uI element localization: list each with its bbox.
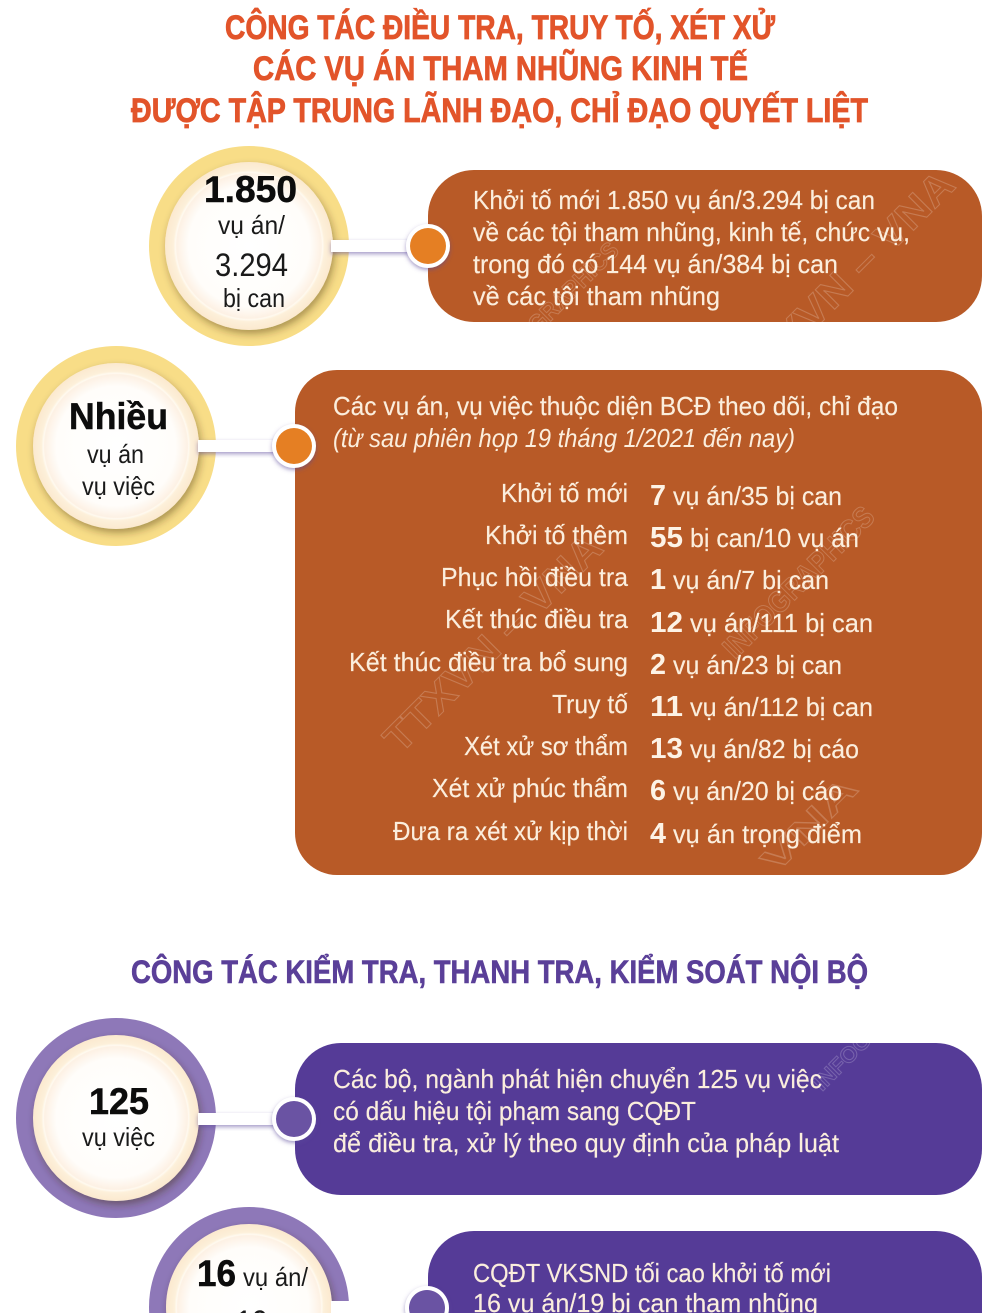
stage values: 55	[650, 522, 683, 554]
panel: new prosecutions: INFOGRAPHICS	[485, 237, 624, 376]
panel: steering committee cases: VNA	[754, 769, 866, 881]
circle: 125 cases: vụ việc	[82, 1122, 155, 1152]
stage labels: Xét xử phúc thẩm	[432, 773, 628, 803]
panel text: để điều tra, xử lý theo quy định của pháp luật	[333, 1128, 840, 1158]
panel: ministries	[295, 1027, 982, 1195]
circle: 1.850 cases: bị can	[223, 283, 285, 313]
circle: 125 cases: 125	[89, 1081, 149, 1122]
circle: many cases: vụ việc	[82, 471, 155, 501]
panel text: CQĐT VKSND tối cao khởi tố mới	[473, 1258, 831, 1288]
panel text: Khởi tố mới 1.850 vụ án/3.294 bị can	[473, 185, 875, 215]
panel: steering committee cases: INFOGRAPHICS	[717, 500, 881, 665]
circle: many cases	[16, 346, 216, 546]
stage labels: Đưa ra xét xử kịp thời	[393, 816, 628, 846]
panel text: Các bộ, ngành phát hiện chuyển 125 vụ việc	[333, 1064, 822, 1094]
stage values: vụ án/112 bị can	[690, 692, 873, 722]
stage values: 7	[650, 480, 666, 512]
panel text: trong đó có 144 vụ án/384 bị can	[473, 249, 838, 279]
title: CÔNG TÁC ĐIỀU TRA, TRUY TỐ, XÉT XỬ	[225, 8, 776, 47]
circle: 1.850 cases: 3.294	[215, 247, 288, 283]
circle: 16 cases: vụ án/	[243, 1262, 309, 1292]
stage labels	[349, 478, 629, 846]
panel text	[473, 185, 910, 311]
panel: steering committee cases	[295, 370, 982, 881]
circle: many cases: Nhiều	[69, 396, 168, 437]
circle: 1.850 cases: vụ án/	[218, 210, 286, 240]
panel text: về các tội tham nhũng	[473, 281, 720, 311]
circle: 16 cases: 16	[197, 1253, 236, 1294]
stage values: 2	[650, 649, 666, 681]
panel: new prosecutions	[428, 162, 982, 398]
panel text: về các tội tham nhũng, kinh tế, chức vụ,	[473, 217, 910, 247]
circle: many cases: vụ án	[87, 439, 144, 469]
circle: 125 cases	[16, 1018, 216, 1218]
circle: 16 cases	[149, 1207, 349, 1313]
stage labels: Khởi tố thêm	[485, 520, 628, 550]
stage values	[650, 480, 873, 850]
stage values: vụ án/82 bị cáo	[690, 734, 859, 764]
circle: 1.850 cases	[149, 146, 349, 346]
stage labels: Truy tố	[552, 689, 628, 719]
title: CÁC VỤ ÁN THAM NHŨNG KINH TẾ	[253, 50, 748, 88]
section heading: CÔNG TÁC KIỂM TRA, THANH TRA, KIỂM SOÁT NỘI BỘ	[131, 954, 868, 990]
connector: circle 3 to panel	[198, 1097, 316, 1141]
stage values: vụ án trọng điểm	[673, 819, 862, 849]
stage values: 12	[650, 607, 683, 639]
circle: 1.850 cases: 1.850	[204, 169, 297, 210]
connector: circle 4 to panel	[331, 1286, 449, 1313]
title	[131, 8, 868, 130]
stage labels: Kết thúc điều tra	[445, 604, 629, 634]
stage values: 11	[650, 691, 683, 723]
panel heading: (từ sau phiên họp 19 tháng 1/2021 đến nay)	[333, 423, 795, 453]
panel heading: Các vụ án, vụ việc thuộc diện BCĐ theo dõi, chỉ đạo	[333, 391, 898, 421]
panel: steering committee cases: TTXVN – VNA	[375, 525, 611, 761]
stage values: 4	[650, 818, 666, 850]
stage values: vụ án/23 bị can	[673, 650, 842, 680]
panel: new prosecutions: TTXVN – VNA	[727, 162, 963, 398]
stage values: 6	[650, 775, 666, 807]
panel text	[473, 1258, 831, 1313]
stage labels: Khởi tố mới	[501, 478, 628, 508]
stage labels: Kết thúc điều tra bổ sung	[349, 647, 628, 677]
stage values: 1	[650, 564, 666, 596]
stage values: vụ án/111 bị can	[690, 608, 873, 638]
panel text	[333, 1064, 840, 1158]
stage values: vụ án/35 bị can	[673, 481, 842, 511]
panel: supreme procuracy	[428, 1231, 982, 1313]
stage labels: Phục hồi điều tra	[441, 562, 629, 592]
connector: circle 1 to panel	[331, 224, 450, 268]
stage values: vụ án/7 bị can	[673, 565, 829, 595]
title: ĐƯỢC TẬP TRUNG LÃNH ĐẠO, CHỈ ĐẠO QUYẾT LIỆT	[131, 92, 868, 130]
panel: ministries: INFOG	[808, 1027, 876, 1096]
panel heading	[333, 391, 898, 453]
stage values: bị can/10 vụ án	[690, 523, 859, 553]
stage labels: Xét xử sơ thẩm	[464, 731, 628, 761]
stage values: vụ án/20 bị cáo	[673, 776, 842, 806]
panel text: có dấu hiệu tội phạm sang CQĐT	[333, 1096, 696, 1126]
connector: circle 2 to panel	[198, 424, 316, 468]
stage values: 13	[650, 733, 683, 765]
